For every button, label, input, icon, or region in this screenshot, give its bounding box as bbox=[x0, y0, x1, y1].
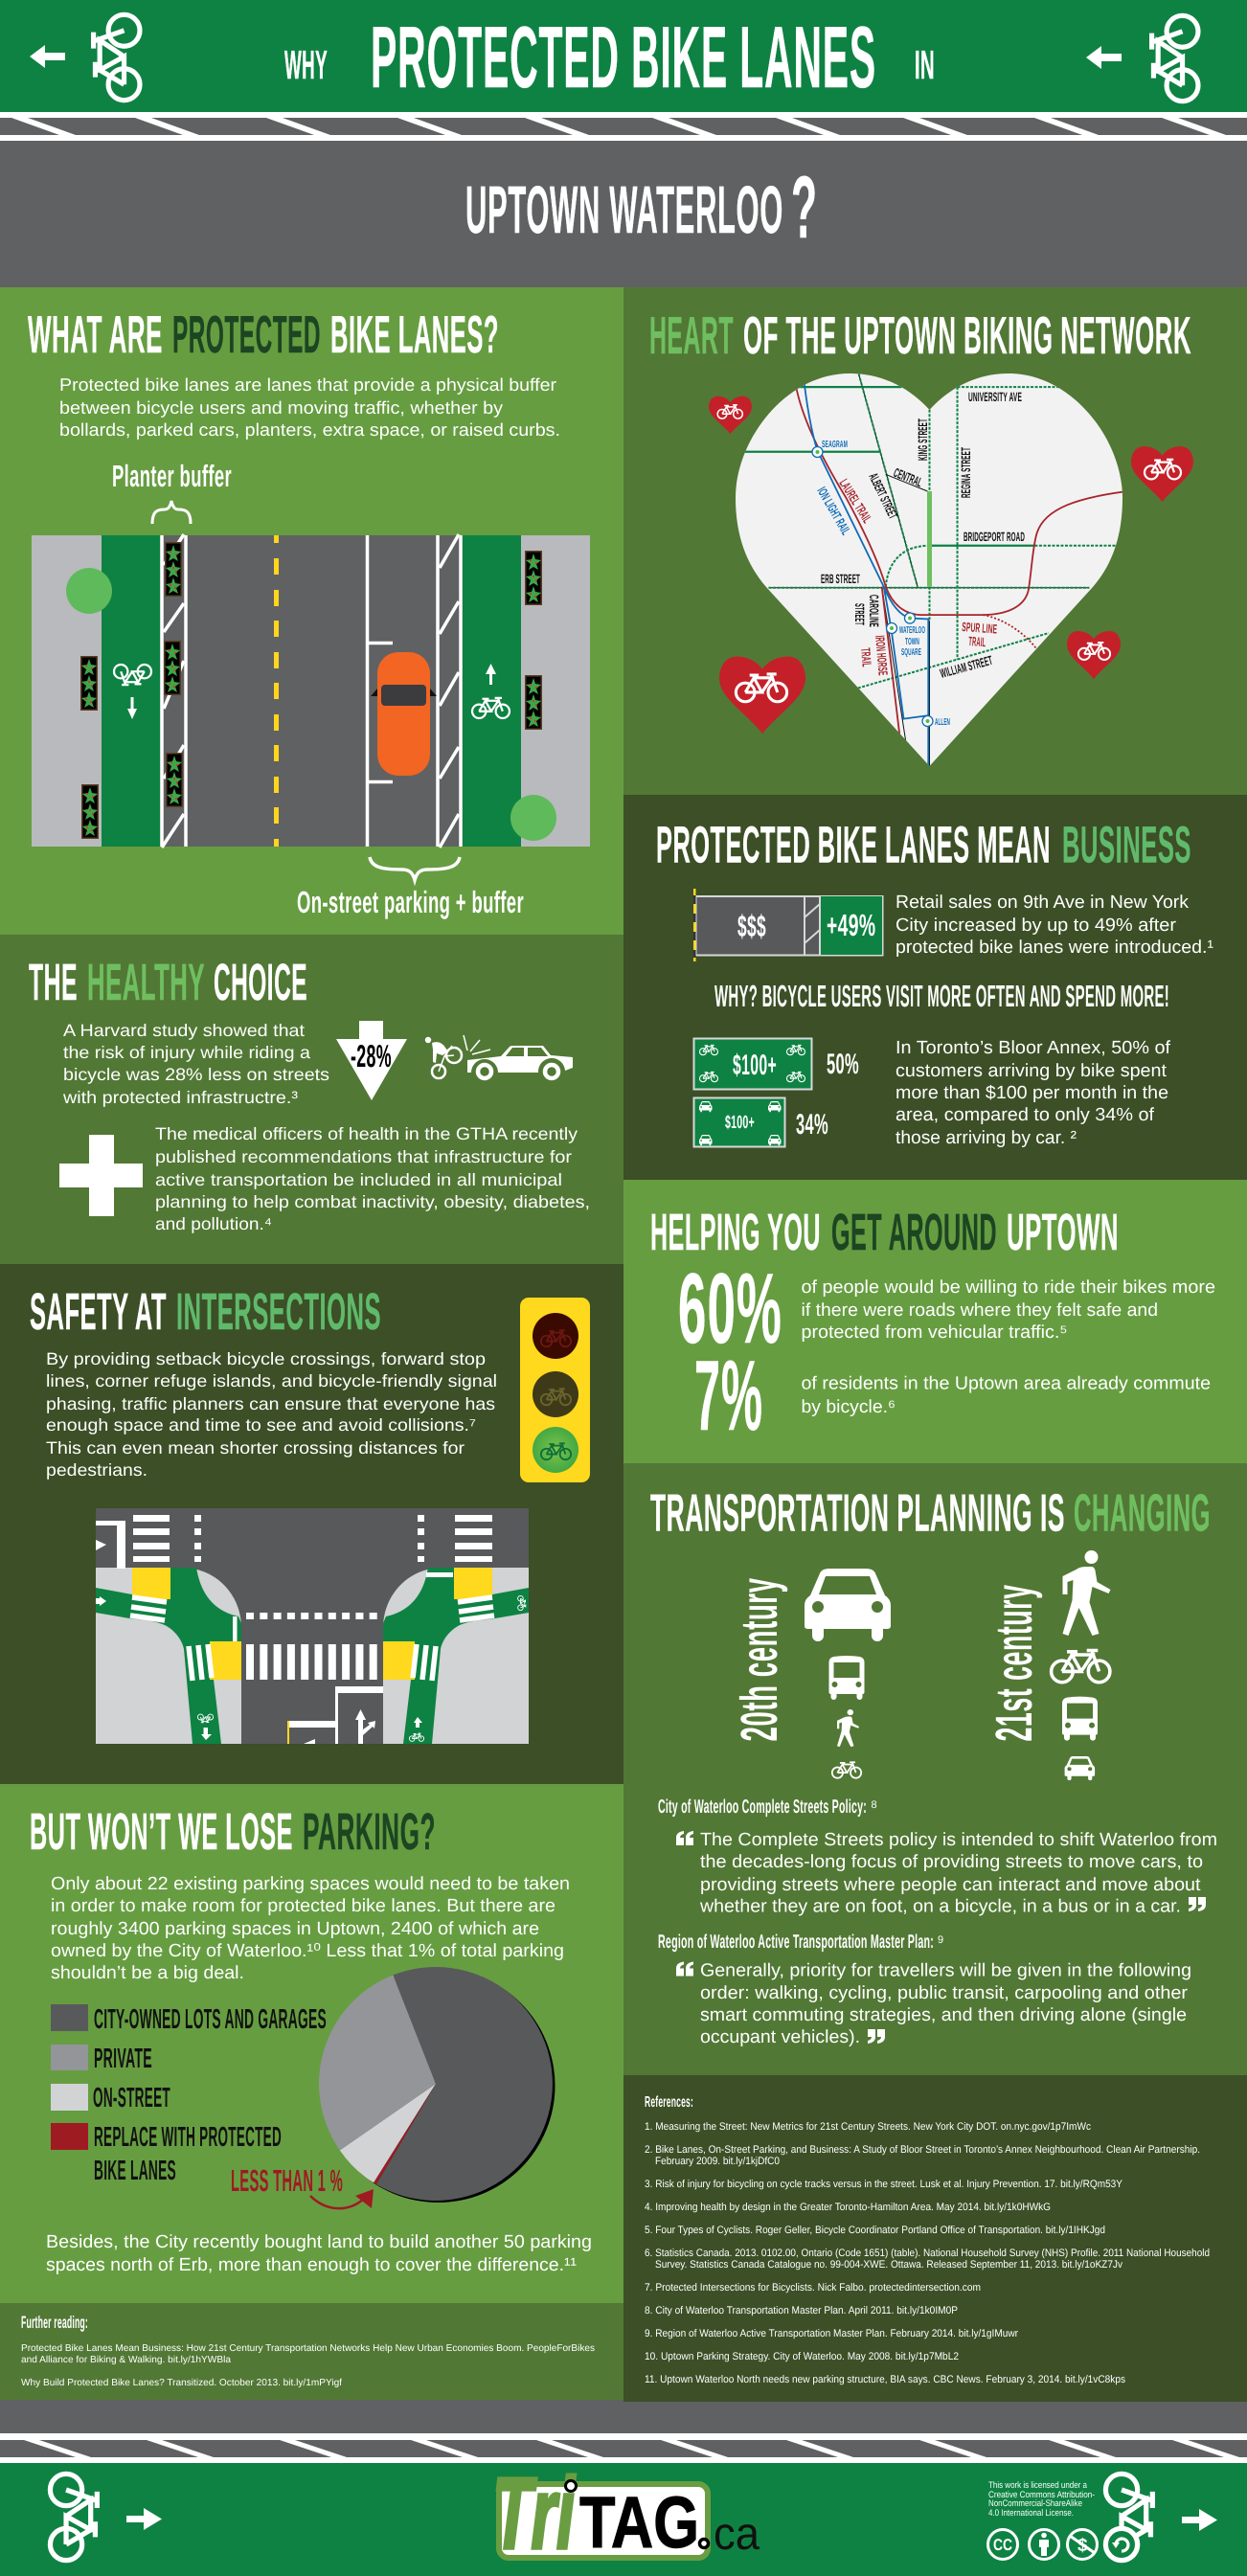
text: besides: spaces north of Erb, more than enough to cover the difference.¹¹ bbox=[46, 2255, 577, 2275]
panel: helping you get around: 7% bbox=[694, 1341, 763, 1452]
text: Protected Bike Lanes Mean Business: How 21st Century Transportation Networks Help New Urban Economies Boom. PeopleForBikes bbox=[21, 2343, 595, 2354]
text: Toronto: area, compared to only 34% of bbox=[896, 1105, 1155, 1125]
reference list: 7. Protected Intersections for Bicyclists. Nick Falbo. protectedintersection.com bbox=[645, 2282, 981, 2294]
text: retail: protected bike lanes were introduced.¹ bbox=[896, 938, 1213, 958]
heading: WHAT ARE bbox=[28, 305, 163, 364]
parked car bbox=[371, 652, 437, 776]
label: 20th century: 20th century bbox=[731, 1578, 788, 1741]
icon: bike lane left bbox=[114, 665, 151, 719]
panel: further reading bbox=[0, 2303, 624, 2400]
intro text: Protected bike lanes are lanes that provide a physical buffer bbox=[59, 374, 556, 395]
map labels: WILLIAM STREET bbox=[939, 653, 994, 681]
text bbox=[46, 1349, 497, 1480]
panel: business bbox=[624, 795, 1247, 1180]
heading: References: bbox=[645, 2094, 693, 2111]
sign: car spending: $100+ bbox=[725, 1113, 755, 1133]
panel: further reading: Further reading: bbox=[21, 2313, 88, 2332]
text: Harvard study: A Harvard study showed that bbox=[63, 1021, 305, 1040]
quote: complete streets: the decades-long focus of providing streets to move cars, to bbox=[700, 1852, 1203, 1872]
legend bbox=[51, 2004, 327, 2186]
map labels: ALLEN bbox=[935, 717, 950, 728]
reference list bbox=[645, 2121, 1210, 2385]
text: Toronto: customers arriving by bike spent bbox=[896, 1061, 1168, 1081]
license text bbox=[988, 2480, 1095, 2519]
text: UPTOWN WATERLOO bbox=[465, 172, 783, 247]
icon: right bicycle bbox=[1152, 15, 1198, 102]
panel: references bbox=[624, 2075, 1247, 2402]
sign: bicycle spending bbox=[693, 1038, 812, 1090]
text: medical officers: The medical officers of health in the GTHA recently bbox=[155, 1124, 578, 1143]
license text: NonCommercial-ShareAlike bbox=[988, 2498, 1082, 2509]
quote: complete streets: providing streets where people can interact and move about bbox=[700, 1875, 1201, 1895]
text: Toronto bbox=[896, 1038, 1171, 1148]
text: 7 percent: by bicycle.⁶ bbox=[801, 1397, 896, 1417]
reference list: 2. Bike Lanes, On-Street Parking, and Business: A Study of Bloor Street in Toronto’s Annex Neighbourhood. Clean Air Partnership. bbox=[645, 2144, 1200, 2156]
text: 60 percent bbox=[801, 1277, 1215, 1343]
icons: creative commons: CC bbox=[993, 2536, 1012, 2554]
panel: transportation planning bbox=[624, 1463, 1247, 2075]
text: shouldn’t be a big deal. bbox=[51, 1963, 244, 1983]
quote: master plan bbox=[676, 1961, 1191, 2047]
road stripe bottom bbox=[0, 2433, 1247, 2463]
text: owned by the City of Waterloo.¹⁰ Less that 1% of total parking bbox=[51, 1941, 564, 1961]
reference list: 9. Region of Waterloo Active Transportation Master Plan. February 2014. bit.ly/1gIMuwr bbox=[645, 2328, 1018, 2339]
header banner bbox=[0, 0, 1247, 112]
icon: left arrow bbox=[30, 45, 65, 68]
callout: less than 1% bbox=[231, 2163, 374, 2208]
icon: down arrow -28%: -28% bbox=[351, 1038, 392, 1073]
parking label: On-street parking + buffer bbox=[297, 885, 524, 919]
map labels: ERB STREET bbox=[821, 572, 860, 586]
text: 60 percent: protected from vehicular traffic.⁵ bbox=[801, 1322, 1067, 1343]
panel: parking: PARKING? bbox=[303, 1803, 436, 1861]
stat: 60%: 60% bbox=[678, 1254, 782, 1365]
label: master plan bbox=[658, 1932, 943, 1953]
map labels: TRAIL bbox=[968, 634, 986, 649]
heading: HEART bbox=[649, 305, 734, 365]
street bar graphic bbox=[693, 889, 883, 961]
text bbox=[51, 1874, 570, 1983]
reference list: 5. Four Types of Cyclists. Roger Geller, Bicycle Coordinator Portland Office of Transportation. bit.ly/1IHKJgd bbox=[645, 2225, 1105, 2236]
icons: 21st century hierarchy bbox=[1052, 1550, 1111, 1780]
icon: medical plus bbox=[59, 1135, 143, 1216]
icon: footer right arrow bbox=[1182, 2509, 1217, 2531]
subtitle bbox=[465, 159, 818, 257]
logo: TriTAG: ca bbox=[714, 2509, 760, 2560]
heading: THE bbox=[29, 954, 78, 1011]
icon: heart 4 bbox=[719, 657, 805, 734]
map labels: UNIVERSITY AVE bbox=[968, 390, 1022, 404]
icon: heart 1 bbox=[709, 396, 752, 434]
map labels: ION LIGHT RAIL bbox=[814, 485, 853, 537]
text: besides: Besides, the City recently bought land to build another 50 parking bbox=[46, 2232, 592, 2252]
icon: footer right bicycle bbox=[1105, 2474, 1152, 2561]
traffic light bbox=[520, 1298, 590, 1482]
text: Toronto: those arriving by car. ² bbox=[896, 1128, 1077, 1148]
heading: GET AROUND bbox=[831, 1204, 997, 1261]
text: ? bbox=[791, 159, 818, 257]
text: Why Build Protected Bike Lanes? Transitized. October 2013. bit.ly/1mPYigf bbox=[21, 2378, 342, 2388]
callout: less than 1%: LESS THAN 1 % bbox=[231, 2163, 343, 2198]
quote: master plan: order: walking, cycling, public transit, carpooling and other bbox=[700, 1983, 1189, 2003]
text: retail bbox=[896, 893, 1213, 958]
label: complete streets bbox=[658, 1796, 877, 1818]
icon: right arrow bbox=[1086, 46, 1122, 69]
map: heart bbox=[736, 373, 1122, 766]
icons: creative commons: $ bbox=[1077, 2536, 1088, 2556]
map labels: CAROLINE bbox=[867, 595, 881, 627]
text: retail: Retail sales on 9th Ave in New York bbox=[896, 893, 1190, 913]
map labels bbox=[814, 390, 1025, 728]
legend: PRIVATE bbox=[94, 2044, 152, 2074]
map labels: ALBERT STREET bbox=[866, 471, 900, 521]
reference list: 4. Improving health by design in the Greater Toronto-Hamilton Area. May 2014. bit.ly/1k0HWkG bbox=[645, 2202, 1051, 2213]
brace: parking bbox=[370, 857, 460, 880]
text: Toronto: more than $100 per month in the bbox=[896, 1083, 1168, 1103]
panel: what are protected bike lanes bbox=[0, 287, 624, 935]
street diagram bbox=[32, 534, 590, 847]
map labels: STREET bbox=[852, 603, 867, 625]
map labels: REGINA STREET bbox=[959, 447, 973, 498]
text: 7 percent: of residents in the Uptown area already commute bbox=[801, 1373, 1211, 1394]
panel: safety at intersections: INTERSECTIONS bbox=[176, 1283, 381, 1341]
map: heart: BRIDGEPORT ROAD bbox=[964, 530, 1025, 544]
title: WHY bbox=[284, 42, 328, 87]
street bar graphic: +49% bbox=[827, 908, 875, 942]
map labels: SEAGRAM bbox=[822, 440, 848, 450]
stations bbox=[812, 446, 933, 726]
text: 7 percent bbox=[801, 1373, 1211, 1417]
text: in order to make room for protected bike lanes. But there are bbox=[51, 1896, 555, 1916]
text: Toronto: In Toronto’s Bloor Annex, 50% of bbox=[896, 1038, 1171, 1058]
panel: what are protected bike lanes: BIKE LANES? bbox=[330, 305, 499, 364]
text: medical officers: active transportation be included in all municipal bbox=[155, 1170, 562, 1189]
heading: SAFETY AT bbox=[30, 1283, 167, 1341]
text: By providing setback bicycle crossings, forward stop bbox=[46, 1349, 486, 1368]
reference list: 1. Measuring the Street: New Metrics for 21st Century Streets. New York City DOT. on.nyc.gov/1p7ImWc bbox=[645, 2121, 1091, 2133]
stat: 50%: 50% bbox=[827, 1049, 859, 1080]
quote: complete streets: The Complete Streets policy is intended to shift Waterloo from bbox=[700, 1830, 1217, 1850]
sign: car spending bbox=[693, 1097, 785, 1147]
quote: complete streets: whether they are on foot, on a bicycle, in a bus or in a car. bbox=[699, 1896, 1181, 1917]
legend: ON-STREET bbox=[93, 2083, 170, 2113]
text: medical officers bbox=[155, 1124, 590, 1233]
map labels: TOWN bbox=[905, 637, 919, 647]
heading: BUT WON’T WE LOSE bbox=[30, 1803, 293, 1861]
text: retail: City increased by up to 49% after bbox=[896, 915, 1177, 936]
road stripe top bbox=[0, 112, 1247, 141]
street bar graphic: $$$ bbox=[737, 909, 766, 943]
icon: bike crash bbox=[425, 1035, 573, 1078]
title bbox=[284, 10, 935, 106]
logo: TriTAG: TAG bbox=[579, 2482, 699, 2564]
map labels: IRON HORSE bbox=[873, 635, 891, 676]
text: enough space and time to see and avoid collisions.⁷ bbox=[46, 1415, 476, 1435]
text: besides bbox=[46, 2232, 592, 2275]
text: 60 percent: if there were roads where they felt safe and bbox=[801, 1300, 1158, 1321]
panel: parking bbox=[0, 1784, 624, 2303]
text: medical officers: planning to help combat inactivity, obesity, diabetes, bbox=[155, 1192, 590, 1211]
logo: TriTAG: Tri bbox=[492, 2457, 577, 2570]
intersection diagram bbox=[96, 1508, 529, 1744]
planters bbox=[80, 542, 542, 839]
heading: HELPING YOU bbox=[650, 1204, 821, 1261]
reference list: 11. Uptown Waterloo North needs new parking structure, BIA says. CBC News. February 3, 2014. bit.ly/1vC8kps bbox=[645, 2374, 1125, 2385]
legend: BIKE LANES bbox=[94, 2156, 176, 2186]
text: and Alliance for Biking & Walking. bit.ly/1hYWBla bbox=[21, 2355, 231, 2365]
label: master plan: Region of Waterloo Active Transportation Master Plan: bbox=[658, 1932, 934, 1953]
text: Harvard study bbox=[62, 1021, 329, 1107]
map labels: WATERLOO bbox=[899, 625, 925, 636]
license text: Creative Commons Attribution- bbox=[988, 2490, 1095, 2500]
label: complete streets: City of Waterloo Complete Streets Policy: bbox=[658, 1796, 867, 1818]
text: Harvard study: bicycle was 28% less on streets bbox=[63, 1065, 329, 1084]
panel: healthy choice bbox=[0, 935, 624, 1264]
text: pedestrians. bbox=[46, 1460, 147, 1480]
text: medical officers: published recommendations that infrastructure for bbox=[155, 1147, 572, 1166]
planter buffer label: Planter buffer bbox=[112, 459, 232, 493]
map labels: CENTRAL bbox=[892, 465, 924, 489]
text: roughly 3400 parking spaces in Uptown, 2400 of which are bbox=[51, 1919, 539, 1939]
map labels: LAUREL TRAIL bbox=[836, 477, 874, 526]
label: complete streets: 8 bbox=[872, 1799, 877, 1811]
text: medical officers: and pollution.⁴ bbox=[155, 1214, 272, 1233]
text: This can even mean shorter crossing distances for bbox=[46, 1438, 465, 1457]
text: Harvard study: with protected infrastructre.³ bbox=[62, 1088, 298, 1107]
text: Only about 22 existing parking spaces would need to be taken bbox=[51, 1874, 570, 1894]
reference list: 10. Uptown Parking Strategy. City of Waterloo. May 2008. bit.ly/1p7MbL2 bbox=[645, 2351, 959, 2362]
map labels: SPUR LINE bbox=[962, 620, 998, 637]
license text: This work is licensed under a bbox=[988, 2480, 1088, 2491]
reference list: 8. City of Waterloo Transportation Master Plan. April 2011. bit.ly/1k0IM0P bbox=[645, 2305, 958, 2316]
stat: 34%: 34% bbox=[796, 1109, 828, 1141]
intro text: bollards, parked cars, planters, extra space, or raised curbs. bbox=[59, 419, 560, 440]
icon: footer left arrow bbox=[126, 2508, 162, 2530]
header banner: IN bbox=[915, 42, 935, 87]
icon: footer left bicycle bbox=[50, 2474, 97, 2561]
panel: heart of network bbox=[624, 287, 1247, 795]
quote: complete streets bbox=[676, 1830, 1217, 1917]
heading bbox=[28, 305, 499, 364]
icon: bike lane right bbox=[472, 664, 510, 718]
heading: HEALTHY bbox=[87, 954, 205, 1011]
reference list: 3. Risk of injury for bicycling on cycle tracks versus in the street. Lusk et al. Injury Prevention. 17. bit.ly/RQm53Y bbox=[645, 2179, 1123, 2190]
logo: TriTAG bbox=[492, 2457, 760, 2570]
text: 60 percent: of people would be willing to ride their bikes more bbox=[801, 1277, 1215, 1298]
icon: left bicycle bbox=[94, 14, 140, 101]
brace: planter buffer bbox=[152, 501, 191, 524]
icon: heart 2 bbox=[1131, 446, 1193, 502]
reference list: February 2009. bit.ly/1kjDfC0 bbox=[655, 2156, 780, 2167]
quote: master plan: Generally, priority for travellers will be given in the following bbox=[700, 1961, 1191, 1980]
icons: 20th century hierarchy bbox=[805, 1569, 891, 1778]
panel: transportation planning: 21st century bbox=[986, 1584, 1043, 1741]
icons: creative commons bbox=[988, 2530, 1136, 2559]
intro text bbox=[59, 374, 560, 440]
panel: healthy choice: CHOICE bbox=[214, 954, 307, 1011]
map labels: TRAIL bbox=[858, 647, 874, 667]
heading: PROTECTED bbox=[172, 305, 321, 364]
trees bbox=[66, 568, 556, 841]
icon: down arrow -28% bbox=[336, 1021, 407, 1100]
panel: safety at intersections bbox=[0, 1264, 624, 1784]
panel: helping you get around: UPTOWN bbox=[1007, 1204, 1119, 1261]
legend: REPLACE WITH PROTECTED bbox=[94, 2122, 282, 2153]
quote: master plan: smart commuting strategies, and then driving alone (single bbox=[700, 2005, 1187, 2025]
panel: parking: CITY-OWNED LOTS AND GARAGES bbox=[94, 2004, 327, 2035]
intro text: between bicycle users and moving traffic, whether by bbox=[59, 397, 504, 418]
sign: bicycle spending: $100+ bbox=[733, 1050, 777, 1081]
panel: helping you get around bbox=[624, 1180, 1247, 1463]
reference list: Survey. Statistics Canada Catalogue no. 99-004-XWE. Ottawa. Released September 11, 2013. bit.ly/1oKZ7Jv bbox=[655, 2259, 1122, 2271]
text: Harvard study: the risk of injury while riding a bbox=[63, 1043, 311, 1062]
map labels: SQUARE bbox=[901, 647, 921, 658]
quote: master plan: occupant vehicles). bbox=[700, 2027, 860, 2047]
text: phasing, traffic planners can ensure that everyone has bbox=[46, 1394, 495, 1413]
map labels: KING STREET bbox=[916, 418, 930, 461]
license text: 4.0 International License. bbox=[988, 2508, 1074, 2519]
pie chart bbox=[319, 1967, 555, 2203]
footer banner bbox=[0, 2457, 1247, 2576]
icon: heart 3 bbox=[1067, 631, 1121, 679]
text bbox=[21, 2343, 595, 2388]
text: lines, corner refuge islands, and bicycle-friendly signal bbox=[46, 1371, 497, 1390]
label: master plan: 9 bbox=[938, 1934, 943, 1946]
